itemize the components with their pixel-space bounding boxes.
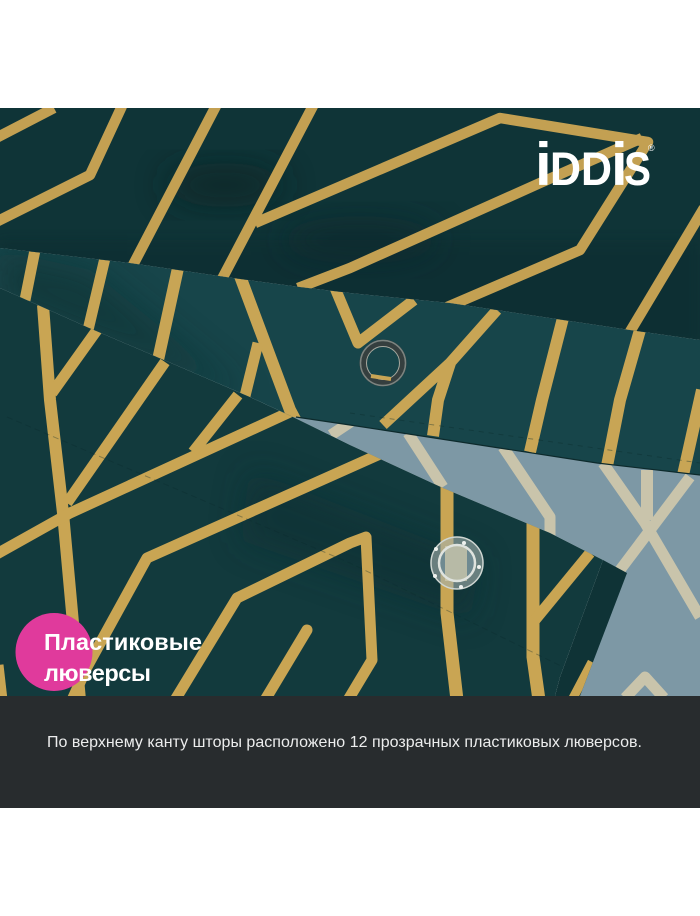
middle layer of curtain with gold lines — [0, 245, 700, 480]
eyelet: transparent plastic grommet on front flap — [431, 537, 483, 589]
caption text: По верхнему канту шторы расположено 12 прозрачных пластиковых люверсов. — [47, 734, 642, 751]
eyelet: metal grommet on middle layer — [360, 340, 406, 386]
front flap of curtain, green with gold lines — [0, 285, 610, 700]
heading: plastic eyelets: люверсы — [44, 660, 151, 686]
logo: iDDiS: S — [624, 142, 651, 195]
reverse side of curtain, blue fabric — [280, 410, 700, 698]
logo: iDDiS: DD — [550, 142, 612, 195]
fold shadow — [296, 417, 700, 475]
logo: iDDiS — [535, 131, 655, 198]
back layer of curtain, dark green with gold lines — [0, 104, 700, 345]
top hem stitch — [350, 413, 700, 463]
side hem of flap — [555, 560, 627, 696]
stitch line — [48, 434, 540, 656]
heading: plastic eyelets: Пластиковые — [44, 629, 202, 655]
heading: plastic eyelets — [44, 629, 202, 686]
logo: iDDiS: ® — [648, 143, 655, 153]
logo: iDDiS: i — [535, 131, 552, 198]
pink circle accent — [16, 613, 92, 691]
caption band — [0, 696, 700, 808]
logo: iDDiS: i — [611, 131, 628, 198]
panel: curtain photo — [0, 104, 700, 700]
